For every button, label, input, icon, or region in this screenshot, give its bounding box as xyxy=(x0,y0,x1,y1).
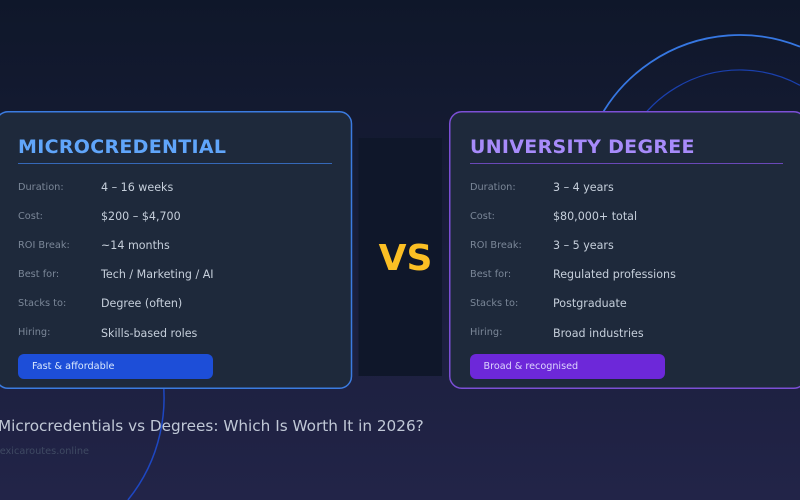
row: best for xyxy=(470,268,676,281)
row: roi break: ROI Break: xyxy=(18,240,70,251)
row: best for: Best for: xyxy=(18,269,59,280)
decorative arc: top right inner xyxy=(615,70,800,195)
row: best for: Best for: xyxy=(470,269,511,280)
row: best for: Regulated professions xyxy=(553,268,676,281)
row: stacks to xyxy=(18,297,182,310)
divider xyxy=(470,163,783,164)
row: hiring: Skills-based roles xyxy=(101,327,198,340)
row: hiring xyxy=(470,327,644,340)
badge: fast and affordable: Fast & affordable xyxy=(32,361,114,372)
row: hiring xyxy=(18,327,198,340)
row: hiring: Hiring: xyxy=(470,327,502,338)
row: duration: Duration: xyxy=(18,182,64,193)
row: hiring: Hiring: xyxy=(18,327,50,338)
badge: broad and recognised xyxy=(470,354,665,379)
row: cost: $80,000+ total xyxy=(553,210,637,223)
row: stacks to: Stacks to: xyxy=(470,298,518,309)
vs panel xyxy=(358,138,442,376)
row: roi break xyxy=(18,239,170,252)
decorative arc: top right outer xyxy=(580,35,800,195)
panel: microcredential xyxy=(0,112,352,388)
row: best for: Tech / Marketing / AI xyxy=(100,268,214,281)
heading: university degree: UNIVERSITY DEGREE xyxy=(470,136,695,158)
row: duration: Duration: xyxy=(470,182,516,193)
decorative arc: bottom left xyxy=(128,360,164,500)
row: cost: $200 – $4,700 xyxy=(101,210,181,223)
row: roi break: 3 – 5 years xyxy=(553,239,614,252)
title: Microcredentials vs Degrees: Which Is Worth It in 2026? xyxy=(0,417,424,435)
vs label: VS xyxy=(379,238,432,279)
row: cost xyxy=(470,210,637,223)
row: hiring: Broad industries xyxy=(553,327,644,340)
row: duration xyxy=(18,181,173,194)
badge: broad and recognised: Broad & recognised xyxy=(484,361,578,372)
row: stacks to: Postgraduate xyxy=(553,297,627,310)
badge: fast and affordable xyxy=(18,354,213,379)
row: roi break: ~14 months xyxy=(101,239,170,252)
row: cost: Cost: xyxy=(470,211,495,222)
row: best for xyxy=(18,268,214,281)
row: roi break xyxy=(470,239,614,252)
row: stacks to xyxy=(470,297,627,310)
row: cost: Cost: xyxy=(18,211,43,222)
row: duration xyxy=(470,181,614,194)
row: stacks to: Stacks to: xyxy=(18,298,66,309)
row: duration: 3 – 4 years xyxy=(553,181,614,194)
row: cost xyxy=(18,210,181,223)
panel: university degree xyxy=(450,112,800,388)
heading: microcredential: MICROCREDENTIAL xyxy=(18,136,226,158)
row: duration: 4 – 16 weeks xyxy=(101,181,173,194)
row: stacks to: Degree (often) xyxy=(101,297,182,310)
row: roi break: ROI Break: xyxy=(470,240,522,251)
divider xyxy=(18,163,332,164)
